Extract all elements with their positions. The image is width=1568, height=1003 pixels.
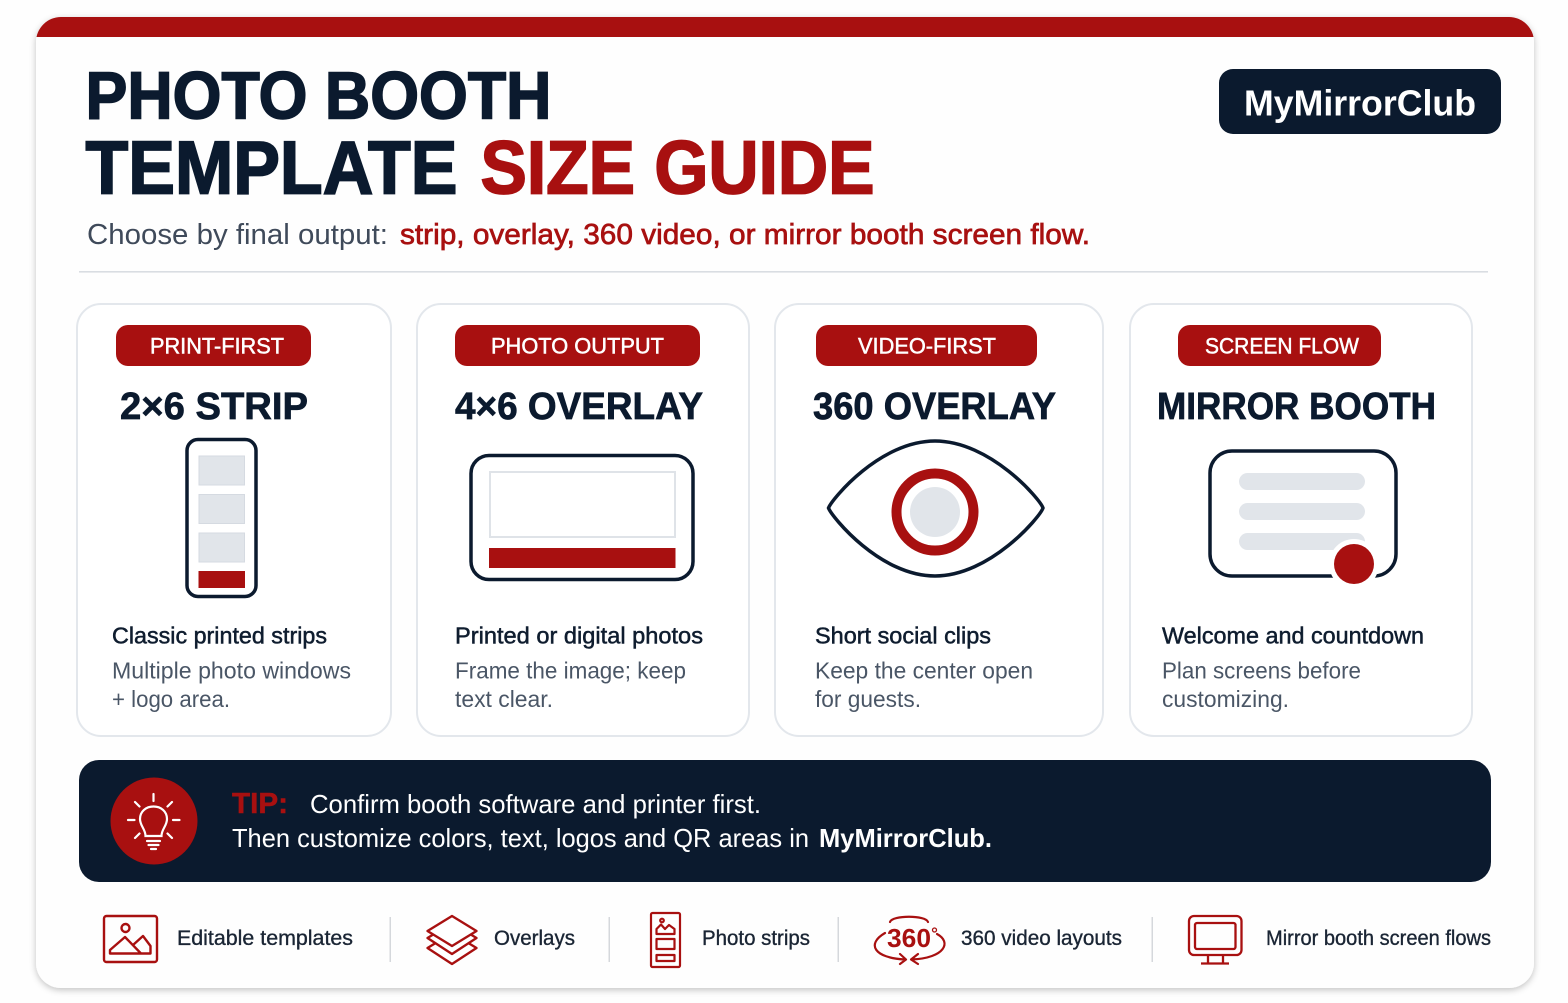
icon: screen flow [1210,451,1396,589]
title: TEMPLATE [86,126,458,210]
badge: screen flow: SCREEN FLOW [1205,334,1359,358]
tip text: Confirm booth software and printer first. [310,789,761,819]
tip text: MyMirrorClub. [819,823,992,853]
card text: Multiple photo windows [112,658,351,684]
footer feature row [104,913,1491,967]
tip text [232,788,992,853]
title: SIZE GUIDE [480,126,874,210]
card text: for guests. [815,686,921,712]
icon: light bulb [110,778,198,864]
badge: screen flow [1178,325,1381,366]
badge: video-first [816,325,1037,366]
card text [1162,622,1424,712]
heading: 2x6 strip: 2×6 STRIP [120,386,308,428]
icon: editable templates [104,916,157,962]
icon: photo strips [651,913,680,967]
badge: photo output [455,325,700,366]
heading: 4x6 overlay: 4×6 OVERLAY [455,386,703,428]
card text: Welcome and countdown [1162,622,1424,648]
badge: video-first: VIDEO-FIRST [858,334,996,358]
logo badge [1219,69,1501,134]
panel: mirror booth [1130,304,1472,736]
label: mirror booth screen flows: Mirror booth screen flows [1266,927,1491,950]
card text: + logo area. [112,686,230,712]
icon: overlays [428,916,476,964]
label: editable templates: Editable templates [177,927,353,950]
title: PHOTO BOOTH [86,58,552,134]
heading: 360 overlay: 360 OVERLAY [813,386,1056,428]
badge: print-first [116,325,311,366]
card text [815,622,1033,712]
icon: mirror booth screen [1189,916,1242,964]
heading: mirror booth: MIRROR BOOTH [1157,386,1436,428]
tip banner [79,760,1491,882]
card text [112,622,351,712]
tip text: Then customize colors, text, logos and QR areas in [232,823,809,853]
badge: print-first: PRINT-FIRST [150,334,284,358]
card text: text clear. [455,686,553,712]
subtitle: strip, overlay, 360 video, or mirror booth screen flow. [400,219,1090,251]
label: overlays: Overlays [494,927,575,950]
label: photo strips: Photo strips [702,927,810,950]
logo badge: MyMirrorClub [1244,82,1476,124]
card text [455,622,703,712]
top red bar [36,17,1534,37]
subtitle: Choose by final output: [87,219,388,251]
title [86,58,874,210]
panel: 4x6 overlay [417,304,749,736]
icon: eye ring [828,441,1043,576]
panel: 360 overlay [775,304,1103,736]
icon: 360 video: 360 [887,923,931,953]
card text: Keep the center open [815,658,1033,684]
card text: customizing. [1162,686,1289,712]
icon: 360 video [875,917,945,964]
card text: Plan screens before [1162,658,1361,684]
label: 360 video layouts: 360 video layouts [961,927,1122,950]
subtitle [87,219,1090,251]
panel: 2x6 strip [77,304,391,736]
card text: Short social clips [815,622,991,648]
icon: overlay frame [471,456,693,580]
badge: photo output: PHOTO OUTPUT [491,334,664,358]
card text: Classic printed strips [112,622,327,648]
card text: Frame the image; keep [455,658,686,684]
icon: photo strip [187,440,256,596]
card text: Printed or digital photos [455,622,703,648]
tip text: TIP: [232,788,288,820]
